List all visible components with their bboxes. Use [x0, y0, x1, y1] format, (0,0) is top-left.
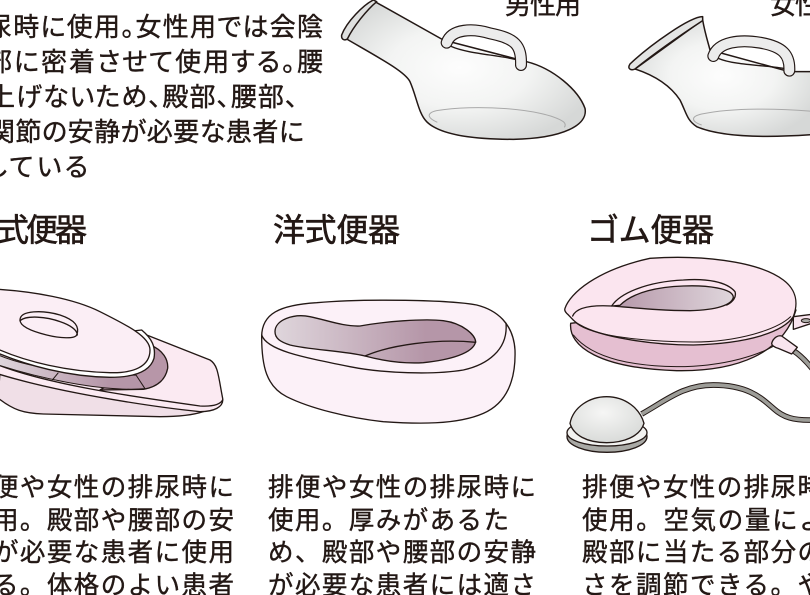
illustration: Japanese style bedpan — [0, 289, 223, 417]
heading: Western style bedpan: 洋式便器 — [273, 212, 400, 248]
connector tab — [793, 314, 810, 329]
text block: Western style bedpan description: め、殿部や腰部の安静 — [268, 539, 536, 567]
illustration: Western style bedpan — [262, 300, 515, 423]
text block: rubber bedpan description — [582, 474, 810, 595]
text block: Western style bedpan description: 排便や女性の排尿時に — [268, 474, 536, 502]
text block: Japanese style bedpan description — [0, 474, 234, 595]
air tube to bedpan — [793, 351, 810, 370]
air tube to pump — [642, 385, 810, 420]
text block: Western style bedpan description — [268, 474, 536, 595]
text block: Western style bedpan description: 使用。厚みがあるた — [268, 507, 509, 535]
heading: rubber bedpan: ゴム便器 — [587, 212, 714, 248]
bedpan opening — [20, 312, 78, 338]
illustration: rubber air bedpan with pump — [565, 257, 810, 452]
text block: urinal description — [0, 12, 323, 182]
illustration: male urinal — [342, 0, 585, 139]
air pump bulb — [567, 397, 647, 452]
illustration: female urinal — [629, 17, 810, 136]
